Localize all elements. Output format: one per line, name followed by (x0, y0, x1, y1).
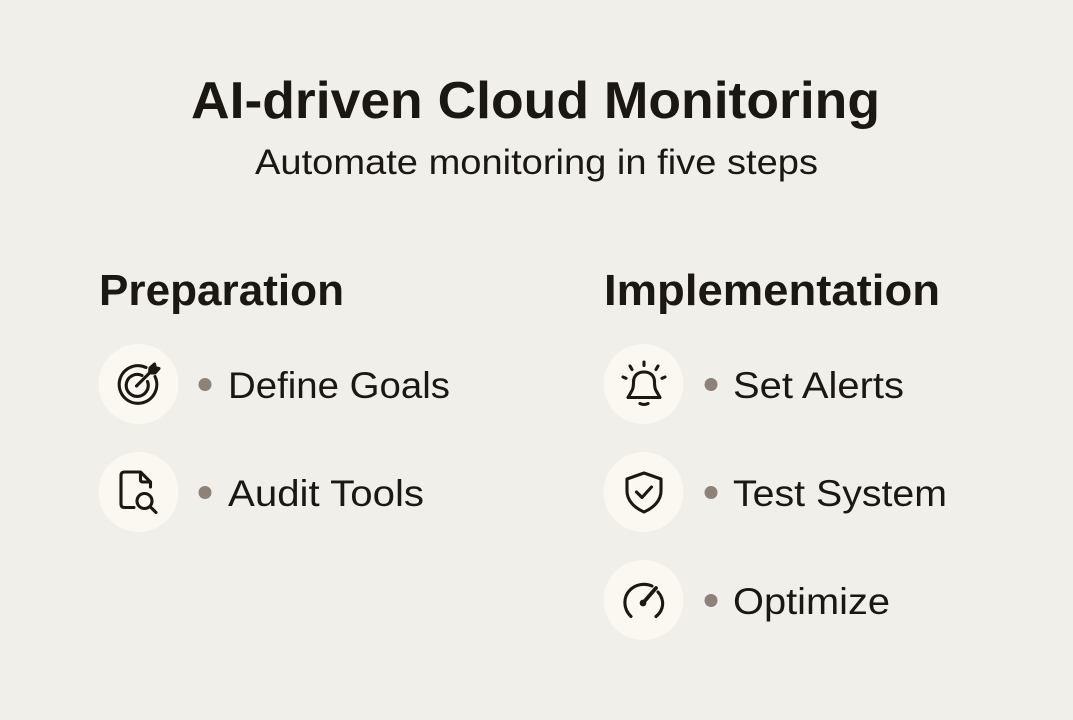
label: Set Alerts (733, 365, 904, 406)
heading: implementation: Implementation (604, 266, 940, 315)
label: Audit Tools (228, 473, 424, 514)
bullet (198, 378, 212, 391)
title: AI-driven Cloud Monitoring (191, 72, 880, 130)
label: Test System (733, 473, 947, 514)
bullet (704, 486, 718, 499)
panel: preparation (98, 266, 450, 532)
subtitle: Automate monitoring in five steps (255, 143, 818, 182)
step: define goals (98, 344, 450, 424)
icon: bell (623, 362, 665, 404)
bullet (704, 594, 718, 607)
icon: document with magnifier (121, 472, 156, 512)
bullet (704, 378, 718, 391)
label: Define Goals (228, 365, 450, 406)
heading: preparation: Preparation (99, 266, 344, 315)
icon: gauge (625, 584, 663, 616)
panel: implementation (604, 266, 947, 640)
icon: shield with check (627, 473, 661, 512)
step: test system (604, 452, 947, 532)
label: Optimize (733, 581, 890, 622)
step: audit tools (98, 452, 424, 532)
step: optimize (604, 560, 890, 640)
step: set alerts (604, 344, 904, 424)
bullet (198, 486, 212, 499)
icon: target with arrow (119, 364, 159, 403)
